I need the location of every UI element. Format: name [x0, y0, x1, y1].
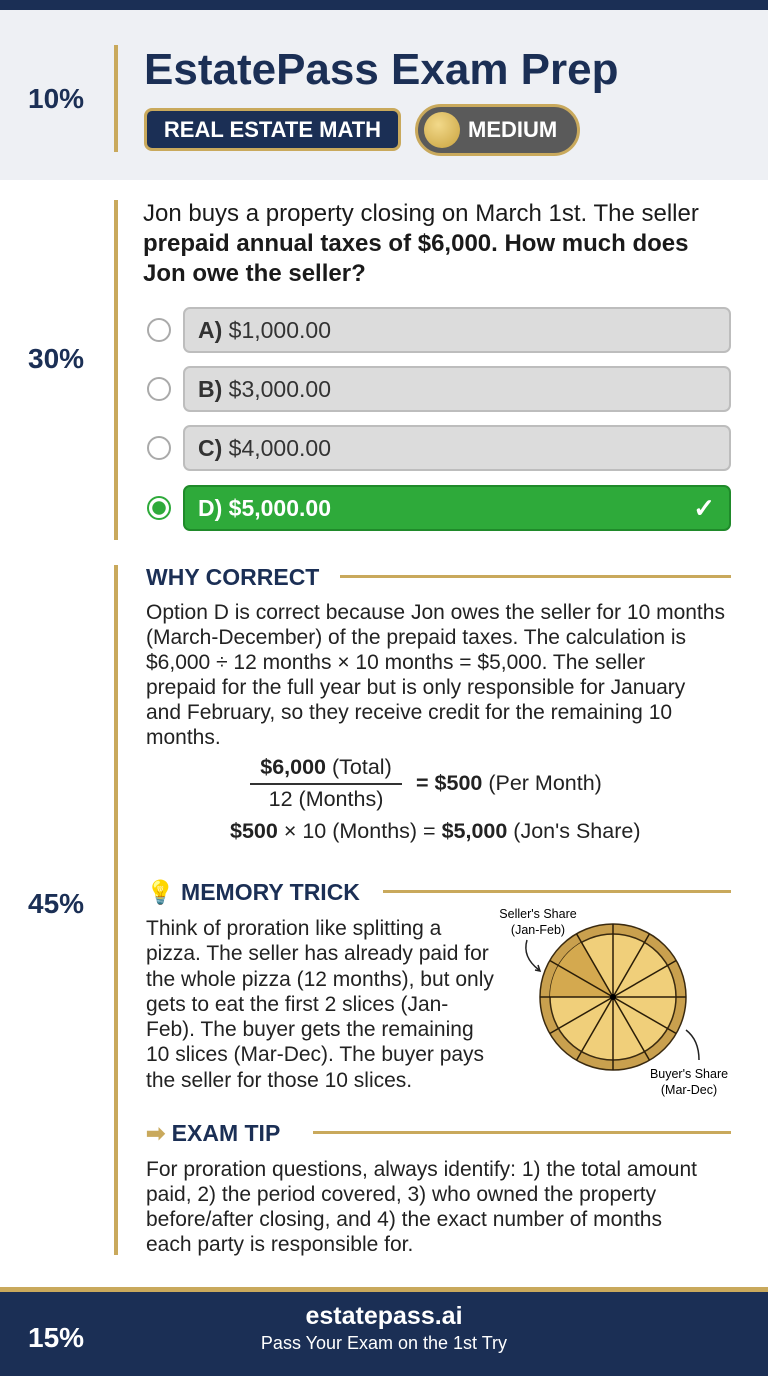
label: 30%: 30% [28, 343, 84, 374]
option D correct [147, 485, 731, 531]
text: exam tip: before/after closing, and 4) the exact number of months [146, 1208, 662, 1231]
text: exam tip [146, 1158, 697, 1256]
badge: medium: MEDIUM [468, 117, 557, 142]
text: memory trick: the seller for those 10 slices. [146, 1069, 412, 1092]
badge: real estate math [144, 108, 401, 151]
top strip [0, 0, 768, 10]
text: ✓ [693, 493, 715, 523]
text: exam tip: each party is responsible for. [146, 1233, 413, 1256]
heading: why correct: WHY CORRECT [146, 564, 319, 590]
text: memory trick: 10 slices (Mar-Dec). The buyer pays [146, 1043, 484, 1066]
chart: pizza [499, 907, 728, 1097]
formula: $500 × 10 (Months) = $5,000 (Jon's Share) [230, 819, 640, 843]
text: B) $3,000.00 [198, 376, 331, 402]
footer [0, 1287, 768, 1376]
footer brand: estatepass.ai [305, 1302, 463, 1330]
formula: $6,000 (Total) [260, 755, 392, 779]
text: memory trick [146, 917, 494, 1092]
text: D) $5,000.00 [198, 495, 331, 521]
text: memory trick: gets to eat the first 2 slices (Jan- [146, 993, 448, 1016]
text: explanation: prepaid for the full year but is only responsible for January [146, 676, 685, 699]
text: explanation: (March-December) of the prepaid taxes. The calculation is [146, 626, 686, 649]
question: prepaid annual taxes of $6,000. How much does [143, 230, 688, 257]
label: 45%: 45% [28, 888, 84, 919]
text: A) $1,000.00 [198, 317, 331, 343]
question: Jon buys a property closing on March 1st. The seller [143, 200, 699, 227]
formula: = $500 (Per Month) [416, 771, 602, 795]
text: memory trick: Think of proration like splitting a [146, 917, 441, 940]
chart: pizza: (Mar-Dec) [661, 1083, 717, 1097]
text: memory trick: pizza. The seller has already paid for [146, 942, 489, 965]
badge: medium [415, 104, 580, 156]
text: memory trick: Feb). The buyer gets the remaining [146, 1018, 474, 1041]
text: exam tip: For proration questions, always identify: 1) the total amount [146, 1158, 697, 1181]
label: 10%: 10% [28, 83, 84, 114]
chart: pizza: Seller's Share [499, 907, 577, 921]
formula: 12 (Months) [269, 787, 383, 811]
option A [147, 307, 731, 353]
footer brand [261, 1302, 507, 1353]
formula [230, 755, 640, 843]
option C [147, 425, 731, 471]
chart: pizza: (Jan-Feb) [511, 923, 565, 937]
question [143, 200, 699, 287]
footer brand: Pass Your Exam on the 1st Try [261, 1333, 507, 1353]
text: explanation: and February, so they receive credit for the remaining 10 [146, 701, 672, 724]
heading: memory trick: 💡 MEMORY TRICK [146, 879, 360, 905]
text: explanation: months. [146, 726, 221, 749]
text: explanation [146, 601, 725, 749]
text: explanation: Option D is correct because Jon owes the seller for 10 months [146, 601, 725, 624]
option B [147, 366, 731, 412]
question: Jon owe the seller? [143, 260, 366, 287]
text: memory trick: the whole pizza (12 months), but only [146, 968, 494, 991]
label: 15%: 15% [28, 1322, 84, 1353]
text: explanation: $6,000 ÷ 12 months × 10 months = $5,000. The seller [146, 651, 645, 674]
badge: real estate math: REAL ESTATE MATH [164, 117, 381, 142]
text: C) $4,000.00 [198, 435, 331, 461]
heading: exam tip: ➡ EXAM TIP [146, 1120, 280, 1146]
header panel [0, 10, 768, 180]
chart: pizza: Buyer's Share [650, 1067, 728, 1081]
text: exam tip: paid, 2) the period covered, 3) who owned the property [146, 1183, 656, 1206]
title: EstatePass Exam Prep [144, 45, 619, 94]
